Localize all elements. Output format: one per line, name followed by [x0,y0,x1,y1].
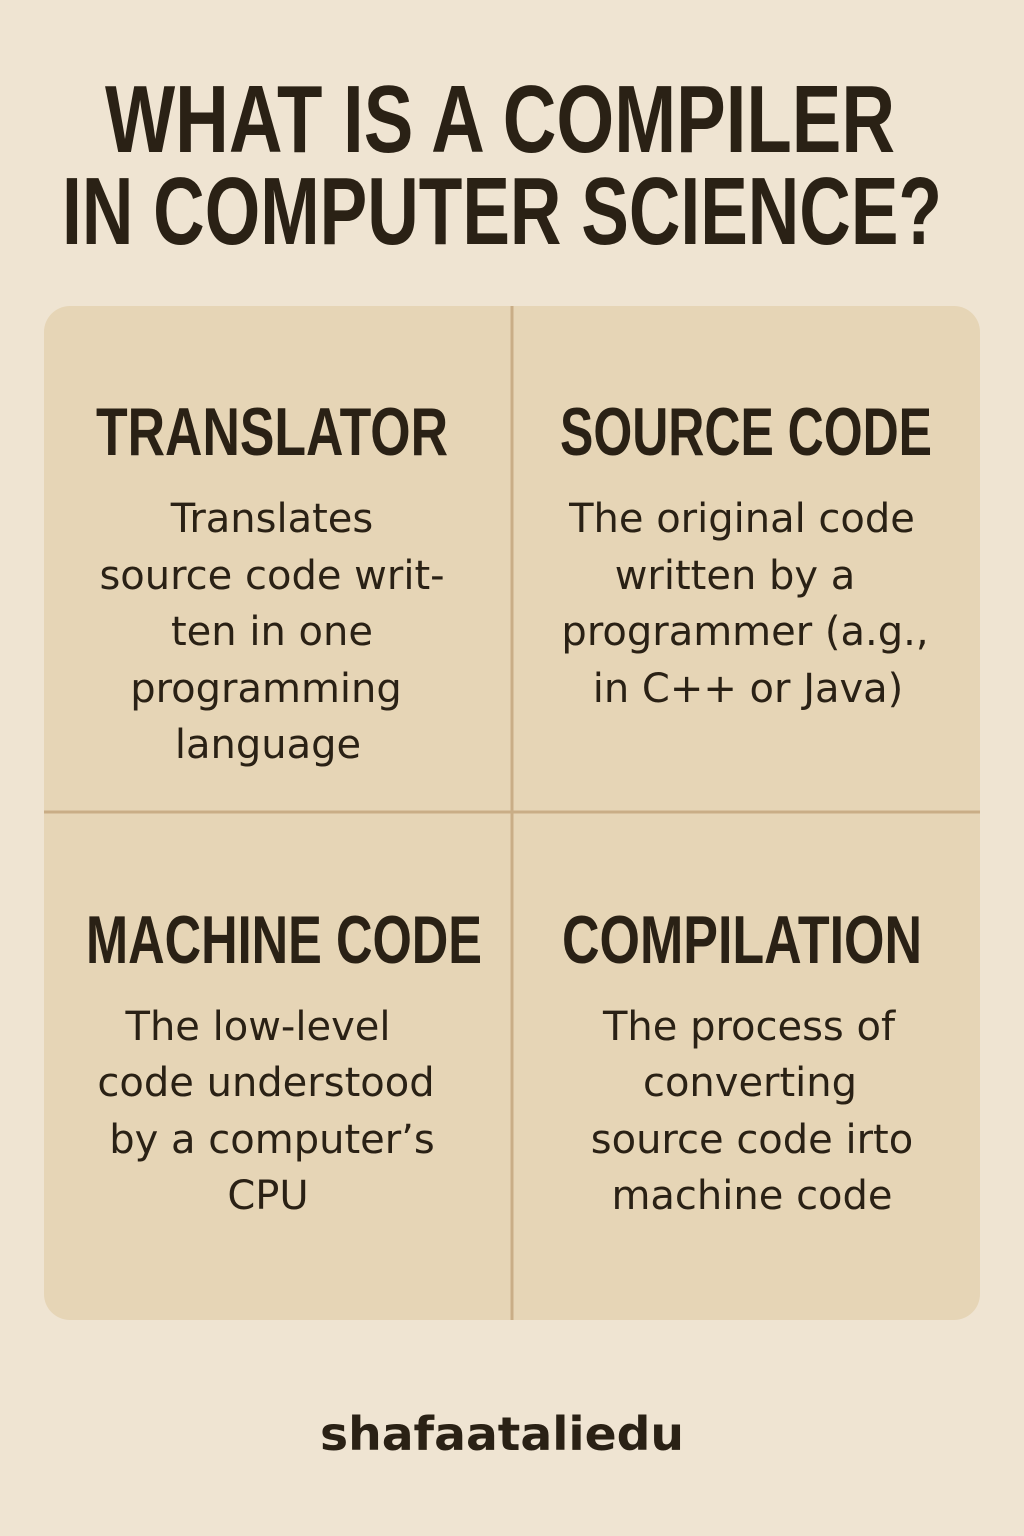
panel: translator: ten in one [171,609,373,655]
panel: compilation [562,902,922,1219]
panel: translator: programming [130,666,402,712]
panel: machine code: CPU [227,1173,309,1219]
panel: source code [560,394,932,712]
panel: compilation: The process of [602,1004,896,1050]
panel: machine code [86,902,482,1219]
panel: translator: TRANSLATOR [96,394,448,470]
panel: compilation: COMPILATION [562,902,922,978]
panel: translator: source code writ- [99,553,445,599]
panel: machine code: code understood [97,1060,435,1106]
panel: compilation: converting [643,1060,857,1106]
panel: source code: The original code [568,496,915,542]
panel: source code: in C++ or Java) [593,666,903,712]
panel: translator [96,394,448,768]
panel: machine code: by a computer’s [109,1117,435,1163]
panel: source code: programmer (a.g., [561,609,929,655]
title [62,66,942,265]
panel: machine code: The low-level [125,1004,390,1050]
panel: source code: written by a [615,553,855,599]
panel: compilation: source code irto [591,1117,913,1163]
footer: shafaataliedu [320,1407,684,1461]
panel: compilation: machine code [611,1173,893,1219]
panel: translator: Translates [170,496,373,542]
panel: machine code: MACHINE CODE [86,902,482,978]
panel: translator: language [175,722,361,768]
panel: grid [44,306,980,1320]
